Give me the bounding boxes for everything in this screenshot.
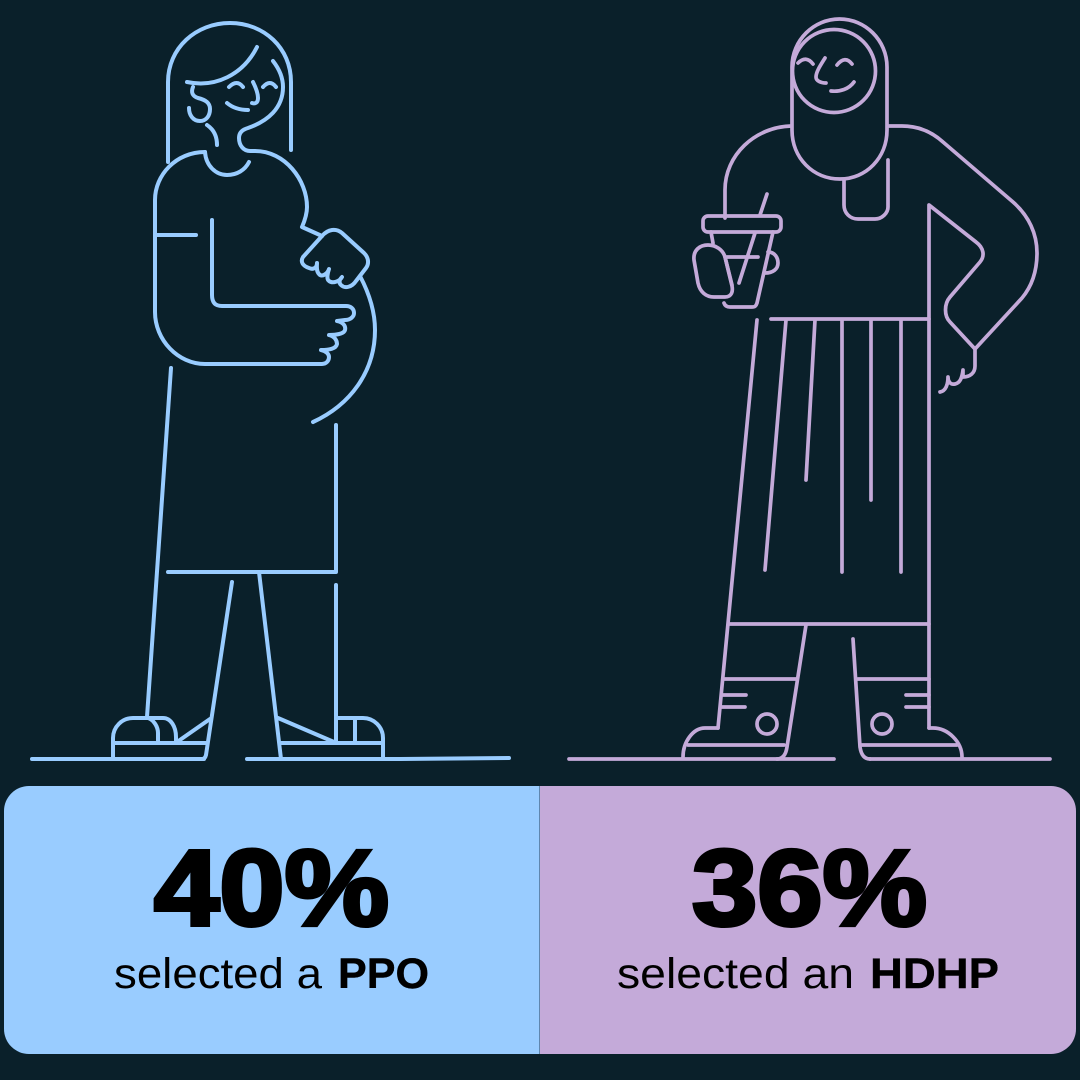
illustration: pregnant woman — [32, 23, 509, 759]
illustration: woman in hijab with drink — [569, 19, 1050, 759]
hair — [168, 23, 291, 162]
panel: HDHP — [540, 786, 1076, 1054]
left shoe — [113, 718, 210, 759]
upper hand — [302, 230, 368, 287]
scarf tail — [844, 160, 888, 219]
dress — [147, 368, 336, 717]
legs — [202, 572, 336, 759]
statistic: 36%: 36% — [692, 827, 927, 948]
sleeve — [155, 233, 196, 237]
panel: PPO — [4, 786, 540, 1054]
hijab — [792, 19, 887, 179]
neckline — [205, 152, 249, 175]
right boot — [853, 639, 962, 759]
caption: selected a PPO: selected a — [114, 950, 322, 998]
eyes, nose and smile — [227, 82, 276, 110]
left boot — [683, 625, 806, 759]
hand on cup — [694, 245, 732, 297]
statistic: 40%: 40% — [154, 827, 389, 948]
drink cup — [703, 194, 781, 307]
caption: selected an HDHP — [617, 950, 999, 998]
fringe — [187, 47, 257, 83]
caption: selected a PPO — [114, 950, 429, 998]
torso side and inner arm — [929, 205, 983, 728]
left shoulder and arm — [725, 126, 791, 218]
eyes, nose and smile — [798, 58, 854, 91]
caption: selected an HDHP: selected an — [617, 950, 854, 998]
skirt — [718, 319, 929, 728]
right shoe — [278, 718, 383, 759]
face and torso outline — [239, 61, 322, 236]
face — [792, 30, 876, 112]
ground — [32, 758, 509, 759]
right arm and hand — [888, 126, 1037, 392]
jaw — [207, 125, 217, 145]
caption: selected a PPO: PPO — [338, 950, 429, 998]
ground — [569, 757, 1050, 761]
caption: selected an HDHP: HDHP — [870, 950, 999, 998]
arm and lower hand — [155, 152, 354, 364]
ear — [189, 87, 210, 121]
belly — [313, 276, 375, 422]
